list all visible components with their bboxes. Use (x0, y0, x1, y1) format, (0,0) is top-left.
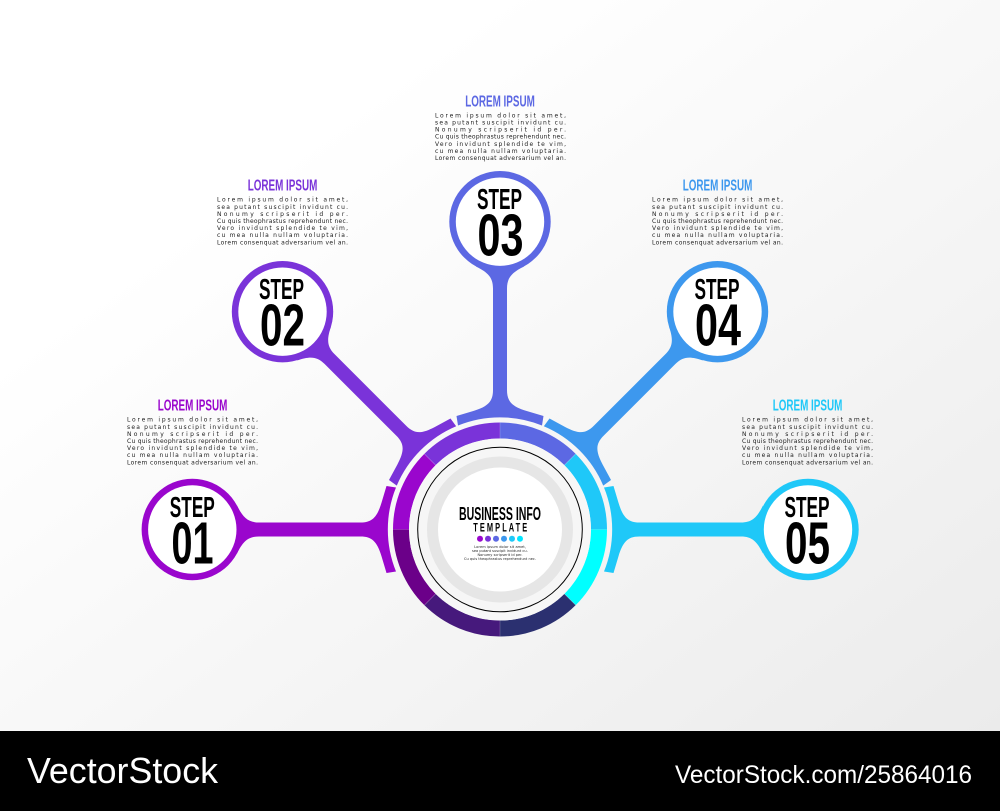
step 2 body: cu mea nulla nullam voluptaria. (217, 232, 348, 239)
step 2 body: Lorem ipsum dolor sit amet, (217, 197, 348, 204)
step 3 body: Cu quis theophrastus reprehendunt nec. (435, 134, 566, 141)
step 3 body: cu mea nulla nullam voluptaria. (435, 148, 566, 155)
step 3 body: Vero invidunt splendide te vim, (435, 141, 566, 148)
step 2 body: Lorem consenquat adversarium vel an. (217, 239, 348, 246)
step 3 badge (449, 171, 551, 272)
step 3 body: Lorem ipsum dolor sit amet, (435, 112, 566, 119)
step 1 badge: STEP (170, 492, 215, 524)
step 2 body (217, 197, 348, 246)
step 3 heading: LOREM IPSUM (465, 93, 535, 110)
step 2 body: Vero invidunt splendide te vim, (217, 225, 348, 232)
step 5 text block (742, 398, 873, 466)
footer url: VectorStock.com/25864016 (675, 761, 972, 789)
step 2 body: Cu quis theophrastus reprehendunt nec. (217, 218, 348, 225)
step 2 badge: 02 (260, 293, 305, 359)
step 5 heading: LOREM IPSUM (773, 398, 842, 415)
step 4 body: Lorem consenquat adversarium vel an. (652, 239, 783, 246)
step 5 badge: 05 (785, 510, 830, 576)
step 5 body: Lorem consenquat adversarium vel an. (742, 459, 873, 466)
step 5 body: cu mea nulla nullam voluptaria. (742, 452, 873, 459)
step 5 connector arm (604, 486, 763, 573)
step 4 body: Nonumy scripserit id per. (652, 211, 783, 218)
step 5 body: Lorem ipsum dolor sit amet, (742, 417, 873, 424)
step 3 body: Lorem consenquat adversarium vel an. (435, 155, 566, 162)
step 2 badge (232, 261, 333, 362)
step 1 body: cu mea nulla nullam voluptaria. (127, 452, 258, 459)
step 2 connector arm (283, 313, 457, 487)
step 5 badge (757, 479, 859, 580)
step 4 body: Cu quis theophrastus reprehendunt nec. (652, 218, 783, 225)
central segmented ring (371, 400, 629, 659)
step 5 body: Vero invidunt splendide te vim, (742, 445, 873, 452)
step 3 body: sea putant suscipit invidunt cu. (435, 120, 566, 126)
step 3 badge: 03 (478, 203, 524, 269)
step 1 body: Cu quis theophrastus reprehendunt nec. (127, 438, 258, 445)
step 1 body: Vero invidunt splendide te vim, (127, 445, 258, 452)
step 4 body: Lorem ipsum dolor sit amet, (652, 197, 783, 204)
step 4 badge: 04 (695, 293, 741, 359)
step 1 badge (142, 479, 243, 580)
step 4 badge (667, 261, 768, 362)
hub body text: Lorem ipsum dolor sit amet, (474, 545, 526, 549)
step 4 text block (652, 178, 783, 246)
step 4 heading: LOREM IPSUM (683, 178, 752, 195)
step 4 connector arm (543, 313, 717, 487)
step 4 body: cu mea nulla nullam voluptaria. (652, 232, 783, 239)
step 1 text block (127, 398, 258, 466)
step 2 badge: STEP (259, 274, 304, 306)
step 2 body: sea putant suscipit invidunt cu. (217, 204, 348, 211)
step 4 badge: STEP (694, 274, 740, 306)
footer band (0, 731, 1000, 811)
hub subtitle: TEMPLATE (473, 522, 527, 535)
hub body text: Nonumy scripserit id per. (478, 553, 522, 557)
step 4 body (652, 197, 783, 246)
step 1 body (127, 417, 258, 466)
step 5 body (742, 417, 873, 466)
step 3 connector arm (456, 266, 544, 426)
step 5 body: sea putant suscipit invidunt cu. (742, 424, 873, 431)
step 1 heading: LOREM IPSUM (158, 398, 227, 415)
step 1 body: sea putant suscipit invidunt cu. (127, 424, 258, 431)
step 2 body: Nonumy scripserit id per. (217, 211, 348, 218)
step 1 connector arm (237, 486, 396, 573)
step 3 text block (435, 93, 566, 162)
footer logo: VectorStock (27, 750, 219, 791)
step 4 body: sea putant suscipit invidunt cu. (652, 204, 783, 211)
hub body text: Cu quis theophrastus reprehendunt nec. (464, 557, 536, 561)
step 3 badge: STEP (477, 184, 522, 216)
central hub (409, 438, 591, 620)
step 1 badge: 01 (172, 510, 214, 576)
step 1 body: Lorem consenquat adversarium vel an. (127, 459, 258, 466)
hub title: BUSINESS INFO (459, 503, 541, 524)
step 5 body: Nonumy scripserit id per. (742, 431, 873, 438)
step 5 body: Cu quis theophrastus reprehendunt nec. (742, 438, 873, 445)
step 5 badge: STEP (784, 492, 830, 524)
step 3 body (435, 112, 566, 162)
step 2 text block (217, 178, 348, 246)
step 4 body: Vero invidunt splendide te vim, (652, 225, 783, 232)
step 3 body: Nonumy scripserit id per. (435, 127, 566, 134)
colour dots (477, 536, 523, 542)
step 1 body: Nonumy scripserit id per. (127, 431, 258, 438)
step 1 body: Lorem ipsum dolor sit amet, (127, 417, 258, 424)
step 2 heading: LOREM IPSUM (248, 178, 317, 195)
hub body text (464, 545, 536, 561)
hub body text: sea putant suscipit invidunt cu. (472, 549, 528, 553)
